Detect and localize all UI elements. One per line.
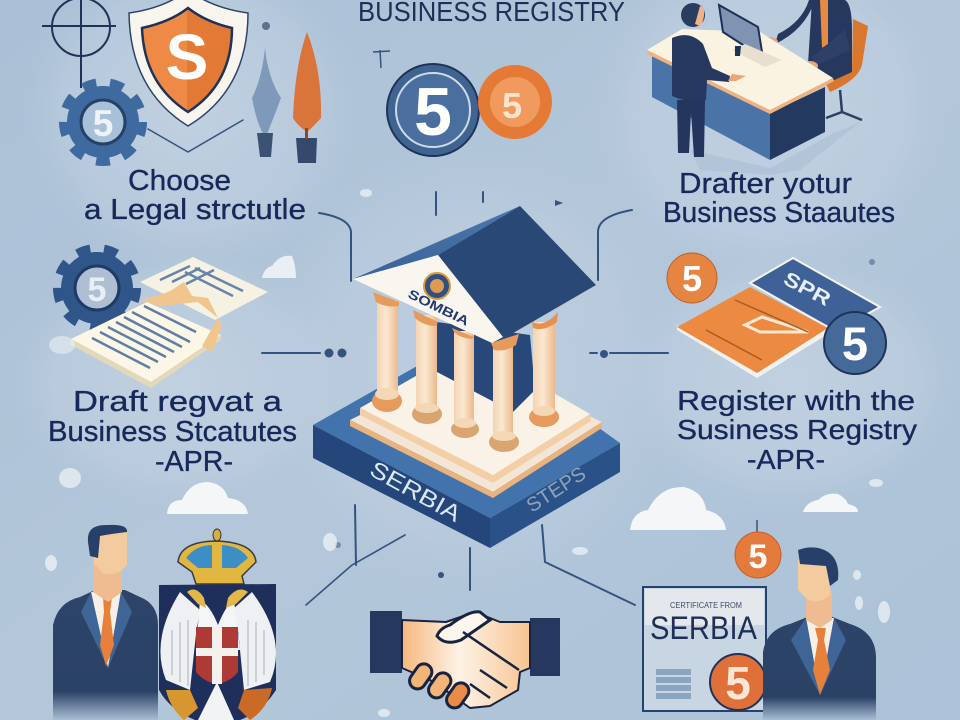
platform: SERBIA (366, 456, 466, 527)
step 1 label: a Legal strctutle (84, 194, 306, 226)
bottom right orange coin: 5 (749, 538, 767, 576)
scattered pale specks (45, 189, 890, 717)
roof (353, 206, 596, 343)
platform: STEPS (523, 463, 590, 517)
step 4 icon: blue coin (824, 312, 886, 374)
crown (178, 529, 256, 584)
step 1 icon: shield: S (166, 21, 208, 93)
step 3 icon: documents (71, 257, 268, 388)
seated man and chair (762, 0, 868, 120)
step 1 icon: grey spear plant (252, 22, 281, 157)
step 2 label: Business Staautes (663, 197, 895, 229)
platform (313, 336, 620, 548)
step 1 label (84, 165, 306, 226)
step 2 label (663, 168, 895, 229)
step 4 icon: registration booklet (677, 258, 880, 378)
step 4 label (677, 385, 917, 475)
step 4 icon: registration booklet: SPR (780, 268, 835, 311)
eagle wings (160, 590, 276, 690)
step 4 icon: orange coin (667, 253, 717, 303)
Serbia certificate: SERBIA (650, 610, 758, 646)
roof: SOMBIA (406, 286, 472, 329)
step number coins: centre top: 5 (414, 74, 452, 150)
column 3 (451, 328, 479, 438)
step 4 icon: orange coin: 5 (682, 258, 702, 299)
desk (647, 29, 834, 160)
right businessman (763, 547, 876, 720)
step 2 label: Drafter yotur (679, 168, 852, 200)
columns (372, 292, 559, 452)
step 1 icon: gear with 5: 5 (93, 103, 113, 144)
step 3 label: Business Stcatutes (48, 416, 297, 448)
step 3 label: -APR- (155, 446, 233, 478)
steps (350, 345, 602, 498)
coat of arms of Serbia (159, 529, 276, 720)
step number coins: centre top (387, 64, 552, 156)
shield cross (196, 627, 238, 684)
step 4 icon: blue coin: 5 (842, 317, 868, 370)
step 1 icon: gear with 5 (64, 83, 142, 161)
Serbia certificate: CERTIFICATE FROM (670, 601, 742, 610)
column 1 (372, 292, 402, 412)
step 3 label (48, 386, 297, 478)
step 4 label: Susiness Registry (677, 414, 917, 445)
step 4 label: -APR- (747, 444, 825, 475)
handshake (370, 611, 560, 711)
back wall (437, 322, 535, 412)
step 2 scene: desk meeting (647, 0, 868, 175)
monitor (719, 5, 782, 67)
standing man (672, 3, 746, 157)
step 1 icon: crosshair (42, 0, 116, 88)
step 3 label: Draft regvat a (73, 386, 283, 418)
step 4 label: Register with the (677, 385, 915, 416)
column back right (529, 312, 559, 427)
column 4 (489, 334, 519, 452)
clouds (49, 256, 858, 530)
step number coins: centre top: 5 (502, 85, 522, 126)
step 1 icon: orange leaf plant (293, 32, 321, 163)
lower ornaments (166, 682, 272, 720)
step 1 icon: shield (129, 0, 248, 126)
step 3 icon: gear: 5 (88, 271, 106, 309)
column 2 (412, 310, 442, 424)
central temple (313, 206, 620, 548)
step 3 icon: gear (58, 249, 136, 327)
certificate seal coin: 5 (725, 657, 751, 709)
bottom right orange coin (735, 520, 781, 578)
step 1 label: Choose (128, 165, 231, 197)
certificate seal coin (710, 654, 766, 710)
scattered small decorations (324, 50, 875, 578)
left businessman (53, 525, 158, 720)
Serbia certificate (643, 587, 766, 711)
connector lines (148, 120, 668, 605)
